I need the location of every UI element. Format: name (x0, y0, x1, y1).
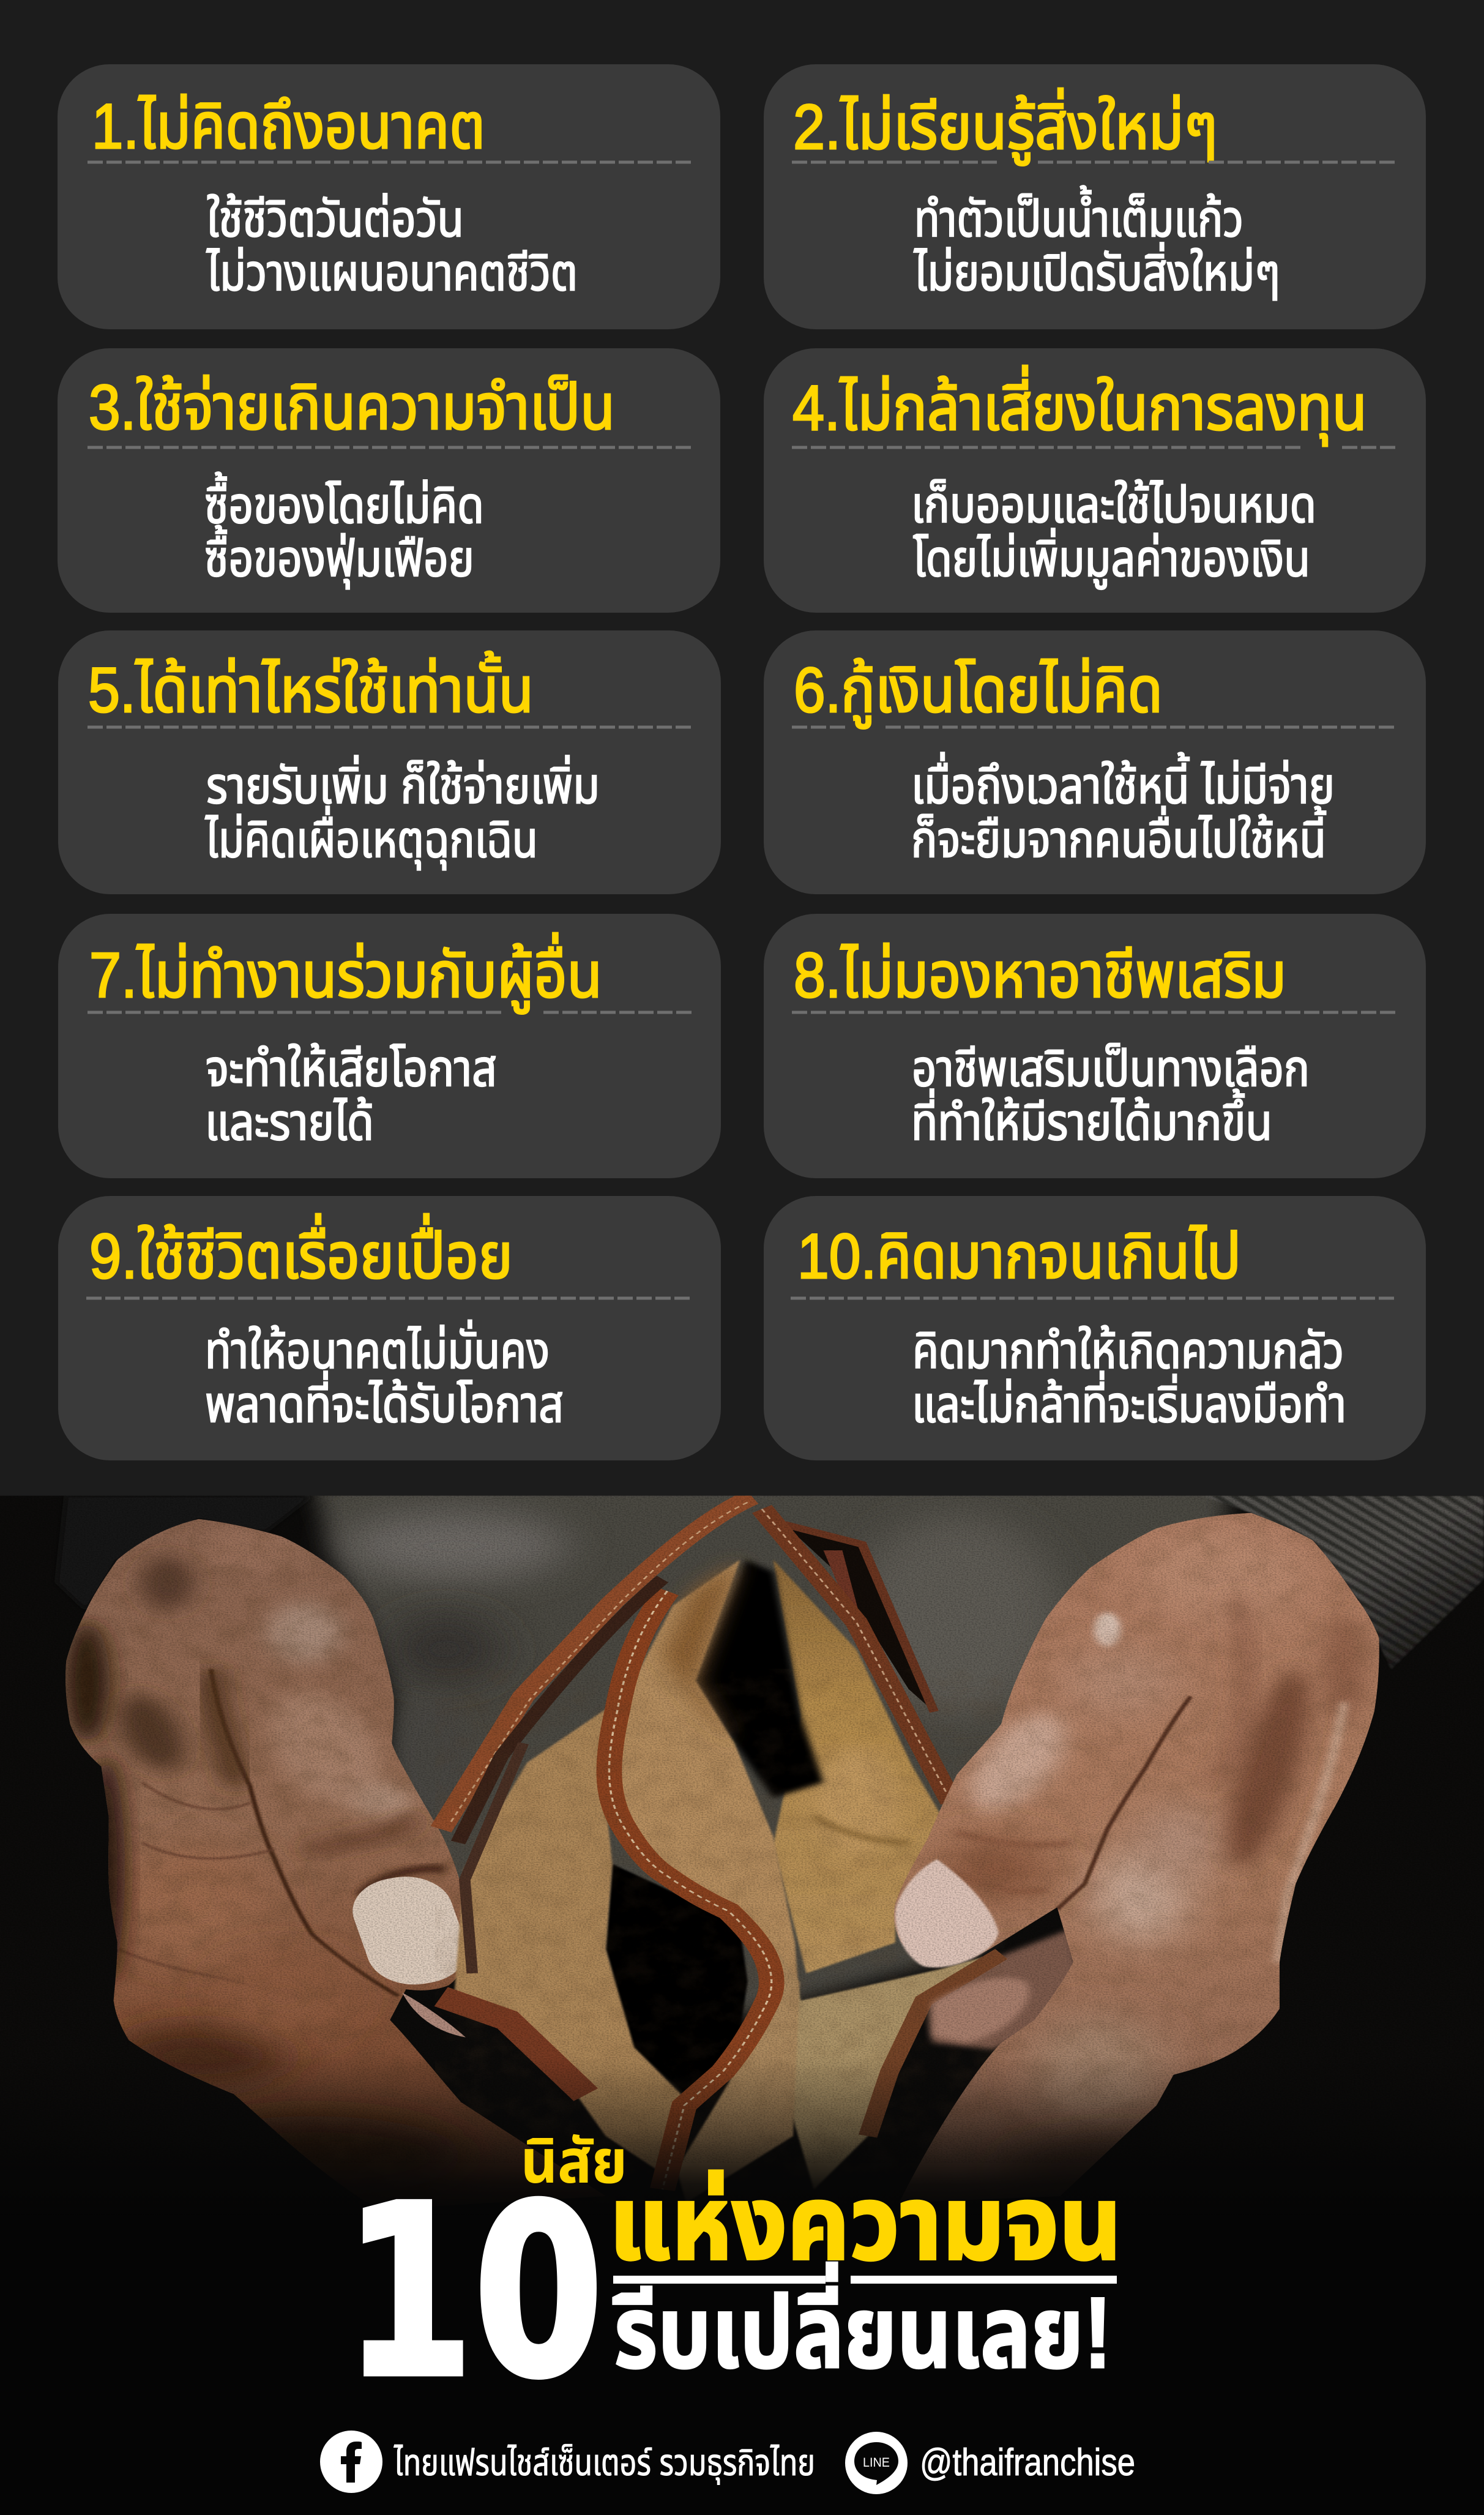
panel: habit 1 (58, 64, 720, 329)
heading 5: 5.ได้เท่าไหร่ใช้เท่านั้น (88, 651, 534, 726)
right hand (880, 1509, 1391, 2216)
text: habit 1 description: ไม่วางแผนอนาคตชีวิต (206, 245, 578, 301)
text: habit 4 description: เก็บออมและใช้ไปจนหมด (911, 477, 1316, 533)
text: facebook page name: ไทยแฟรนไชส์เซ็นเตอร์ รวมธุรกิจไทย (393, 2442, 815, 2485)
panel: habit 7 (58, 914, 721, 1178)
text: habit 5 description: รายรับเพิ่ม ก็ใช้จ่ายเพิ่ม (206, 755, 600, 814)
title: of poverty: แห่งความจน (609, 2166, 1122, 2282)
panel: habit 8 (764, 914, 1426, 1178)
panel: habit 4 (764, 348, 1426, 613)
right sleeve (1202, 1496, 1484, 1669)
icon: line (845, 2432, 908, 2494)
text: habit 6 description: เมื่อถึงเวลาใช้หนี้ ไม่มีจ่าย (911, 752, 1335, 814)
heading 9: 9.ใช้ชีวิตเรื่อยเปื่อย (89, 1214, 513, 1292)
text: habit 5 description: ไม่คิดเผื่อเหตุฉุกเฉิน (204, 806, 538, 870)
text: habit 10 description: และไม่กล้าที่จะเริ่มลงมือทำ (912, 1371, 1346, 1433)
photo: empty wallet held open by two hands (0, 1496, 1484, 2515)
lower pink finger (932, 1978, 1029, 2042)
text: habit 10 description: คิดมากทำให้เกิดความกลัว (912, 1323, 1344, 1379)
text: habit 3 description (204, 472, 484, 589)
text: habit 2 description: ทำตัวเป็นน้ำเต็มแก้ว (914, 185, 1244, 247)
text: line handle: @thaifranchise (920, 2442, 1135, 2484)
sweater and grain texture (0, 1496, 1484, 2163)
bottom fade to black (0, 2056, 1484, 2216)
heading 4: 4.ไม่กล้าเสี่ยงในการลงทุน (792, 365, 1367, 446)
title: change now: รีบเปลี่ยนเลย! (613, 2262, 1112, 2389)
left sleeve (57, 1496, 312, 1610)
left thumbnail (343, 1870, 477, 1992)
main title block (344, 2128, 1122, 2429)
heading 3: 3.ใช้จ่ายเกินความจำเป็น (89, 372, 615, 443)
text: habit 8 description: อาชีพเสริมเป็นทางเลือก (912, 1041, 1310, 1097)
panel: habit 9 (58, 1196, 721, 1460)
text: habit 7 description: จะทำให้เสียโอกาส (206, 1041, 497, 1097)
title: number 10: 10 (344, 2155, 603, 2429)
right thumbnail (895, 1859, 999, 1967)
title: habits word: นิสัย (521, 2128, 627, 2196)
text: habit 7 description: และรายได้ (205, 1095, 374, 1151)
text: habit 3 description: ซื้อของฟุ่มเฟือย (204, 525, 474, 589)
lower fingers behind wallet (402, 1929, 1079, 2049)
text: habit 7 description (205, 1041, 497, 1151)
text: habit 4 description (911, 477, 1316, 589)
left hand (47, 1502, 653, 2223)
text: habit 2 description: ไม่ยอมเปิดรับสิ่งใหม่ๆ (913, 242, 1280, 301)
text: habit 2 description (913, 185, 1280, 301)
heading 8: 8.ไม่มองหาอาชีพเสริม (794, 940, 1286, 1011)
title divider bar (613, 2276, 1117, 2284)
wallet (435, 1497, 1003, 2203)
icon: line: LINE (863, 2456, 890, 2470)
panel: habit 2 (764, 64, 1426, 329)
heading 1: 1.ไม่คิดถึงอนาคต (92, 91, 485, 162)
footer contact row (320, 2431, 1135, 2494)
text: habit 5 description (204, 755, 600, 870)
panel: habit 5 (58, 630, 721, 894)
panel: habit 3 (58, 348, 720, 613)
text: habit 10 description (912, 1323, 1346, 1433)
panel: habit 6 (764, 630, 1426, 894)
icon: facebook (320, 2431, 382, 2493)
panel: habit 10 (764, 1196, 1426, 1460)
text: habit 6 description (911, 752, 1335, 868)
text: habit 9 description: ทำให้อนาคตไม่มั่นคง (205, 1320, 550, 1379)
sweater (312, 1482, 1231, 2016)
heading 6: 6.กู้เงินโดยไม่คิด (794, 655, 1163, 729)
text: habit 9 description: พลาดที่จะได้รับโอกาส (205, 1371, 564, 1433)
text: habit 1 description (206, 192, 578, 301)
text: habit 1 description: ใช้ชีวิตวันต่อวัน (207, 192, 464, 247)
text: habit 4 description: โดยไม่เพิ่มมูลค่าของเงิน (913, 528, 1310, 589)
text: habit 8 description (911, 1041, 1310, 1151)
heading 2: 2.ไม่เรียนรู้สิ่งใหม่ๆ (793, 88, 1218, 166)
heading 7: 7.ไม่ทำงานร่วมกับผู้อื่น (89, 933, 602, 1014)
text: habit 8 description: ที่ทำให้มีรายได้มากขึ้น (911, 1089, 1272, 1151)
text: habit 9 description (205, 1320, 564, 1433)
heading 10: 10.คิดมากจนเกินไป (797, 1221, 1241, 1292)
text: habit 3 description: ซื้อของโดยไม่คิด (204, 472, 484, 534)
text: habit 6 description: ก็จะยืมจากคนอื่นไปใช้หนี้ (911, 806, 1326, 868)
